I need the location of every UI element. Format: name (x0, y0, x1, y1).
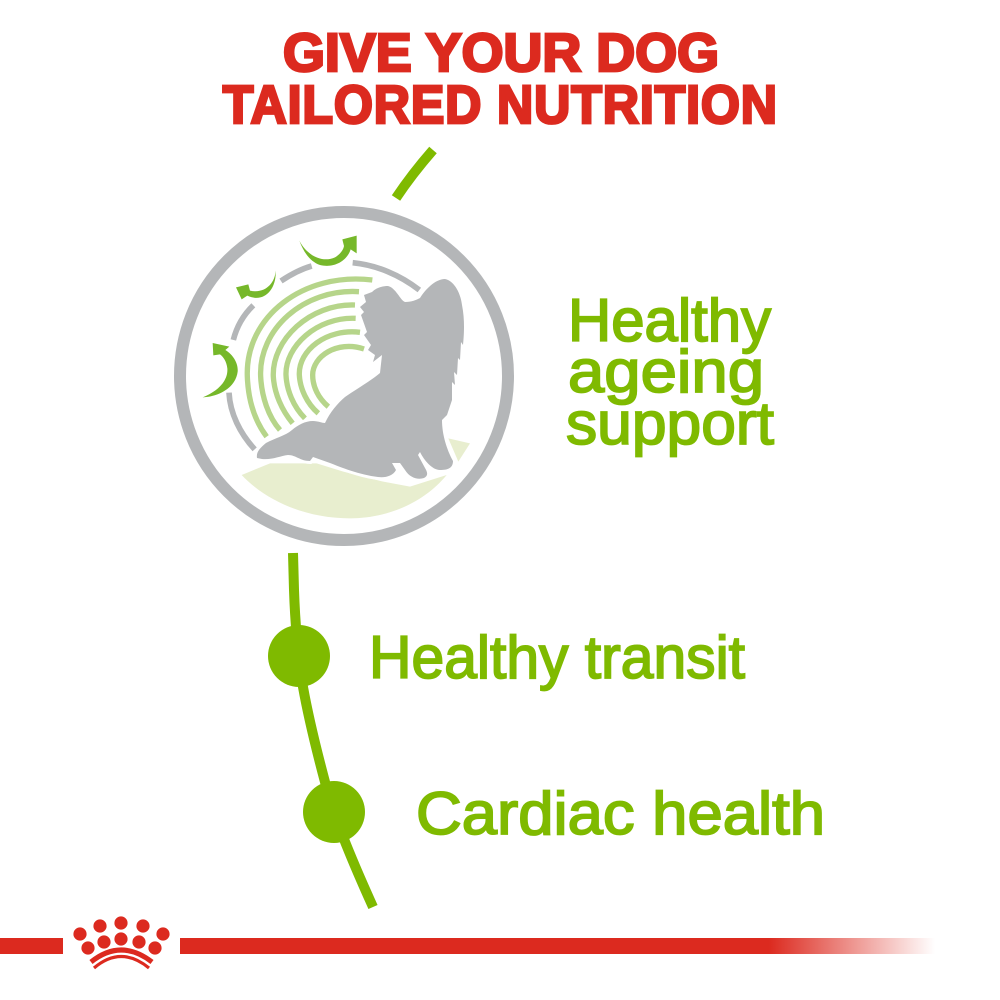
icon: royal crown logo (73, 916, 170, 968)
text: healthy ageing support: Healthy (568, 287, 771, 354)
dog silhouette (257, 279, 464, 479)
title: GIVE YOUR DOG (283, 23, 719, 83)
footer bar: right fading (180, 938, 935, 954)
growth arrows (203, 236, 357, 397)
bullet: healthy transit (268, 625, 330, 687)
badge ring (180, 212, 508, 540)
ground (242, 438, 470, 518)
icon: healthy ageing dog badge (180, 212, 508, 540)
dashed gray arc (229, 263, 419, 449)
connector line: top (396, 150, 433, 198)
text: healthy ageing support: support (566, 390, 774, 457)
text: healthy transit: Healthy transit (369, 624, 745, 691)
footer bar: left (0, 938, 63, 954)
text: healthy ageing support (566, 287, 774, 457)
text: cardiac health: Cardiac health (416, 780, 825, 847)
connector line: bottom (293, 553, 373, 907)
title (223, 23, 777, 135)
bullet: cardiac health (303, 781, 365, 843)
title: TAILORED NUTRITION (223, 75, 777, 135)
concentric green arcs (247, 279, 372, 437)
text: healthy ageing support: ageing (568, 338, 764, 405)
